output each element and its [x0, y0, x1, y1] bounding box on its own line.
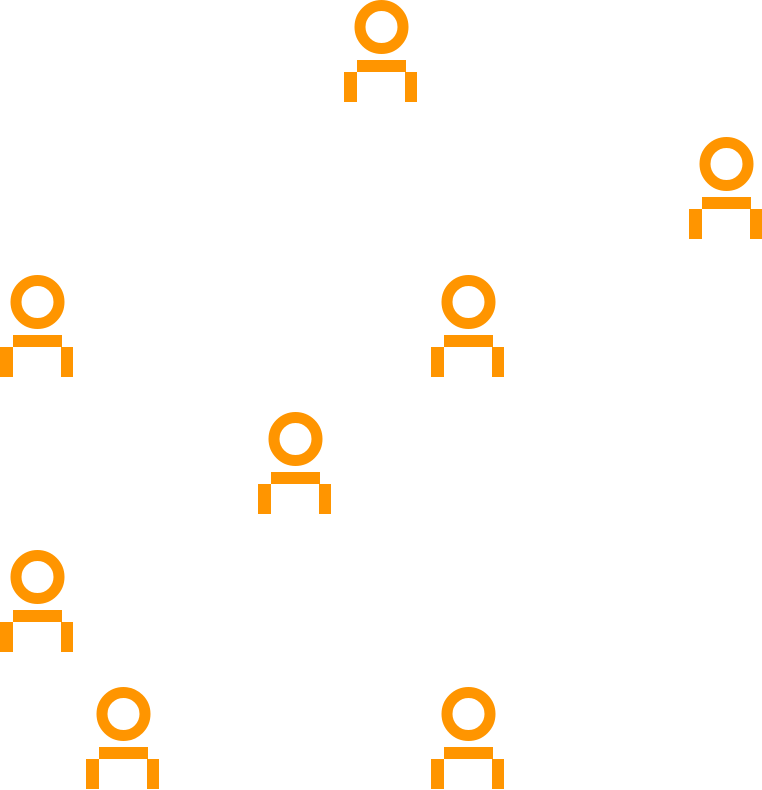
- icon: person 6: [0, 556, 73, 652]
- icon: person 5: [258, 418, 331, 514]
- icon: person 1: [344, 6, 417, 102]
- icon: person 8: [431, 692, 504, 789]
- icon: person 7: [86, 692, 159, 789]
- icon: person 3: [0, 280, 73, 377]
- icon: person 4: [431, 280, 504, 377]
- icon: person 2: [689, 142, 762, 239]
